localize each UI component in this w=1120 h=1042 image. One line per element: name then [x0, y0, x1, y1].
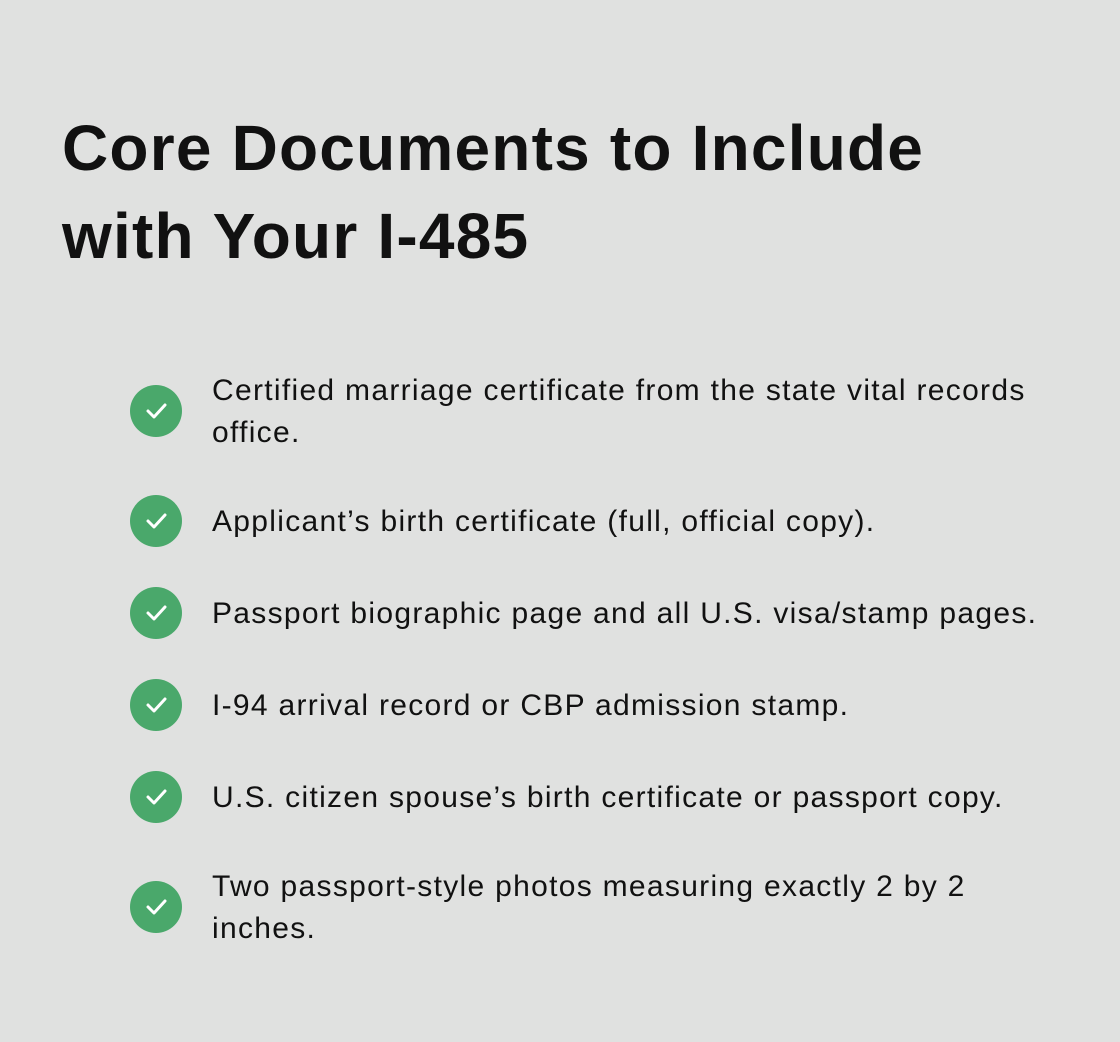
- icon: check 1: [130, 385, 182, 437]
- icon: check 4: [130, 679, 182, 731]
- item 1: Certified marriage certificate from the state vital records office.: [212, 374, 1026, 449]
- icon: check 2: [130, 495, 182, 547]
- title: Core Documents to Include: [62, 112, 924, 184]
- item 2: Applicant’s birth certificate (full, official copy).: [212, 505, 875, 538]
- icon: check 5: [130, 771, 182, 823]
- item 3: Passport biographic page and all U.S. visa/stamp pages.: [212, 597, 1037, 630]
- title: with Your I-485: [62, 200, 529, 272]
- list: documents: [130, 374, 1037, 945]
- icon: check 3: [130, 587, 182, 639]
- title: [62, 112, 924, 272]
- item 5: U.S. citizen spouse’s birth certificate or passport copy.: [212, 781, 1004, 814]
- item 6: Two passport-style photos measuring exactly 2 by 2 inches.: [212, 870, 966, 945]
- icon: check 6: [130, 881, 182, 933]
- item 4: I-94 arrival record or CBP admission stamp.: [212, 689, 849, 722]
